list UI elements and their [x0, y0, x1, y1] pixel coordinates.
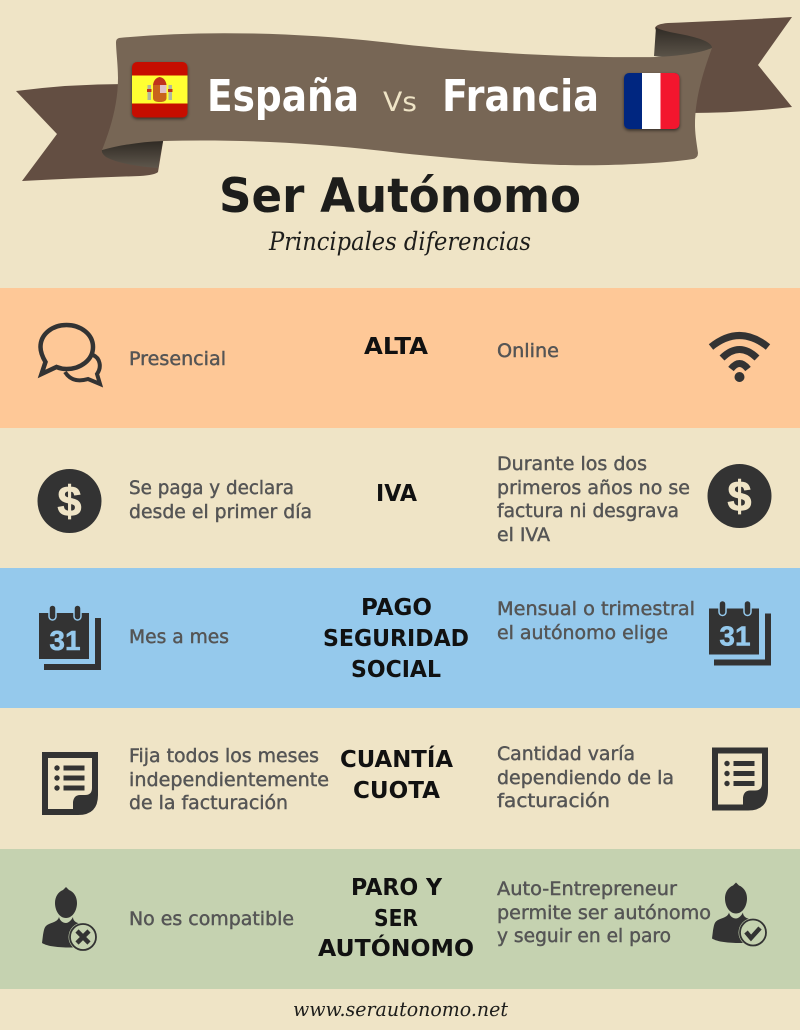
ribbon left fold	[102, 141, 163, 168]
icon: document right	[712, 748, 768, 810]
icon: person with cross	[42, 887, 98, 952]
icon: person with check	[712, 882, 768, 947]
text: Online: Online	[497, 340, 559, 362]
footer url: www.serautonomo.net	[293, 997, 509, 1021]
text: France quota	[497, 743, 674, 812]
banner title: Francia: Francia	[442, 71, 599, 122]
text: France quota: Cantidad varía	[497, 743, 635, 765]
ribbon main band	[102, 33, 712, 165]
text: France IVA: primeros años no se	[497, 477, 690, 499]
label: PAGO SEGURIDAD SOCIAL: SEGURIDAD	[323, 624, 469, 652]
ribbon banner	[16, 17, 792, 181]
text: France quota: dependiendo de la	[497, 767, 674, 789]
row: PARO Y SER AUTÓNOMO	[0, 849, 800, 989]
text: Spain quota: Fija todos los meses	[129, 745, 319, 767]
label: CUANTÍA CUOTA: CUANTÍA	[340, 745, 454, 773]
text: Spain quota: de la facturación	[129, 792, 288, 814]
text: No es compatible: No es compatible	[129, 908, 294, 930]
ribbon left tail	[16, 84, 165, 181]
icon: dollar left	[38, 469, 102, 533]
label: CUANTÍA CUOTA: CUOTA	[353, 776, 441, 804]
text: France IVA	[497, 453, 690, 546]
label: PARO Y SER AUTÓNOMO: SER	[374, 904, 418, 932]
icon: calendar right	[709, 600, 771, 666]
icon: chat bubbles	[40, 325, 100, 384]
text: France IVA: Durante los dos	[497, 453, 647, 475]
text: Auto-Entrepreneur: Auto-Entrepreneur	[497, 878, 677, 900]
text: Mes a mes: Mes a mes	[129, 626, 229, 648]
row: PAGO SEGURIDAD SOCIAL	[0, 568, 800, 708]
icon: dollar left: $	[58, 478, 82, 526]
row: ALTA	[0, 288, 800, 428]
label: PARO Y SER AUTÓNOMO: AUTÓNOMO	[318, 934, 474, 962]
ribbon right tail	[655, 17, 792, 113]
flag: France	[624, 73, 680, 129]
emblem	[147, 77, 172, 102]
icon: document left	[42, 752, 98, 815]
label: CUANTÍA CUOTA	[340, 745, 454, 804]
text: France IVA: el IVA	[497, 524, 550, 546]
text: Spain IVA	[129, 477, 312, 523]
text: Spain IVA: desde el primer día	[129, 501, 312, 523]
text: Auto-Entrepreneur: y seguir en el paro	[497, 925, 671, 947]
label: PARO Y SER AUTÓNOMO: PARO Y	[351, 873, 443, 901]
text: Mensual o trimestral: Mensual o trimestral	[497, 598, 695, 620]
text: Mensual o trimestral: el autónomo elige	[497, 622, 668, 644]
row: IVA	[38, 453, 772, 546]
banner title: España: España	[207, 71, 359, 122]
text: Auto-Entrepreneur: permite ser autónomo	[497, 902, 711, 924]
subtitle: Principales diferencias	[268, 227, 531, 256]
row: CUANTÍA CUOTA	[42, 743, 768, 815]
text: Spain quota	[129, 745, 329, 814]
text: Mensual o trimestral	[497, 598, 695, 644]
text: Spain quota: independientemente	[129, 769, 329, 791]
ribbon right fold	[654, 27, 712, 60]
icon: calendar right: 31	[719, 620, 751, 652]
icon: calendar left: 31	[49, 625, 81, 656]
label: PAGO SEGURIDAD SOCIAL	[323, 593, 469, 683]
label: PAGO SEGURIDAD SOCIAL: SOCIAL	[351, 655, 441, 683]
text: Spain IVA: Se paga y declara	[129, 477, 294, 499]
text: France IVA: factura ni desgrava	[497, 500, 679, 522]
icon: wifi	[711, 336, 768, 382]
text: Auto-Entrepreneur	[497, 878, 711, 947]
banner title: Vs: Vs	[383, 87, 417, 118]
icon: dollar right: $	[728, 473, 752, 521]
label: PARO Y SER AUTÓNOMO	[318, 873, 474, 962]
title: Ser Autónomo	[219, 169, 581, 224]
label: PAGO SEGURIDAD SOCIAL: PAGO	[361, 593, 432, 621]
label: IVA: IVA	[376, 479, 418, 507]
icon: dollar right	[708, 464, 772, 528]
label: ALTA: ALTA	[364, 332, 429, 360]
text: France quota: facturación	[497, 790, 610, 812]
icon: calendar left	[39, 605, 101, 670]
flag: Spain	[132, 62, 188, 118]
text: Presencial: Presencial	[129, 348, 226, 370]
